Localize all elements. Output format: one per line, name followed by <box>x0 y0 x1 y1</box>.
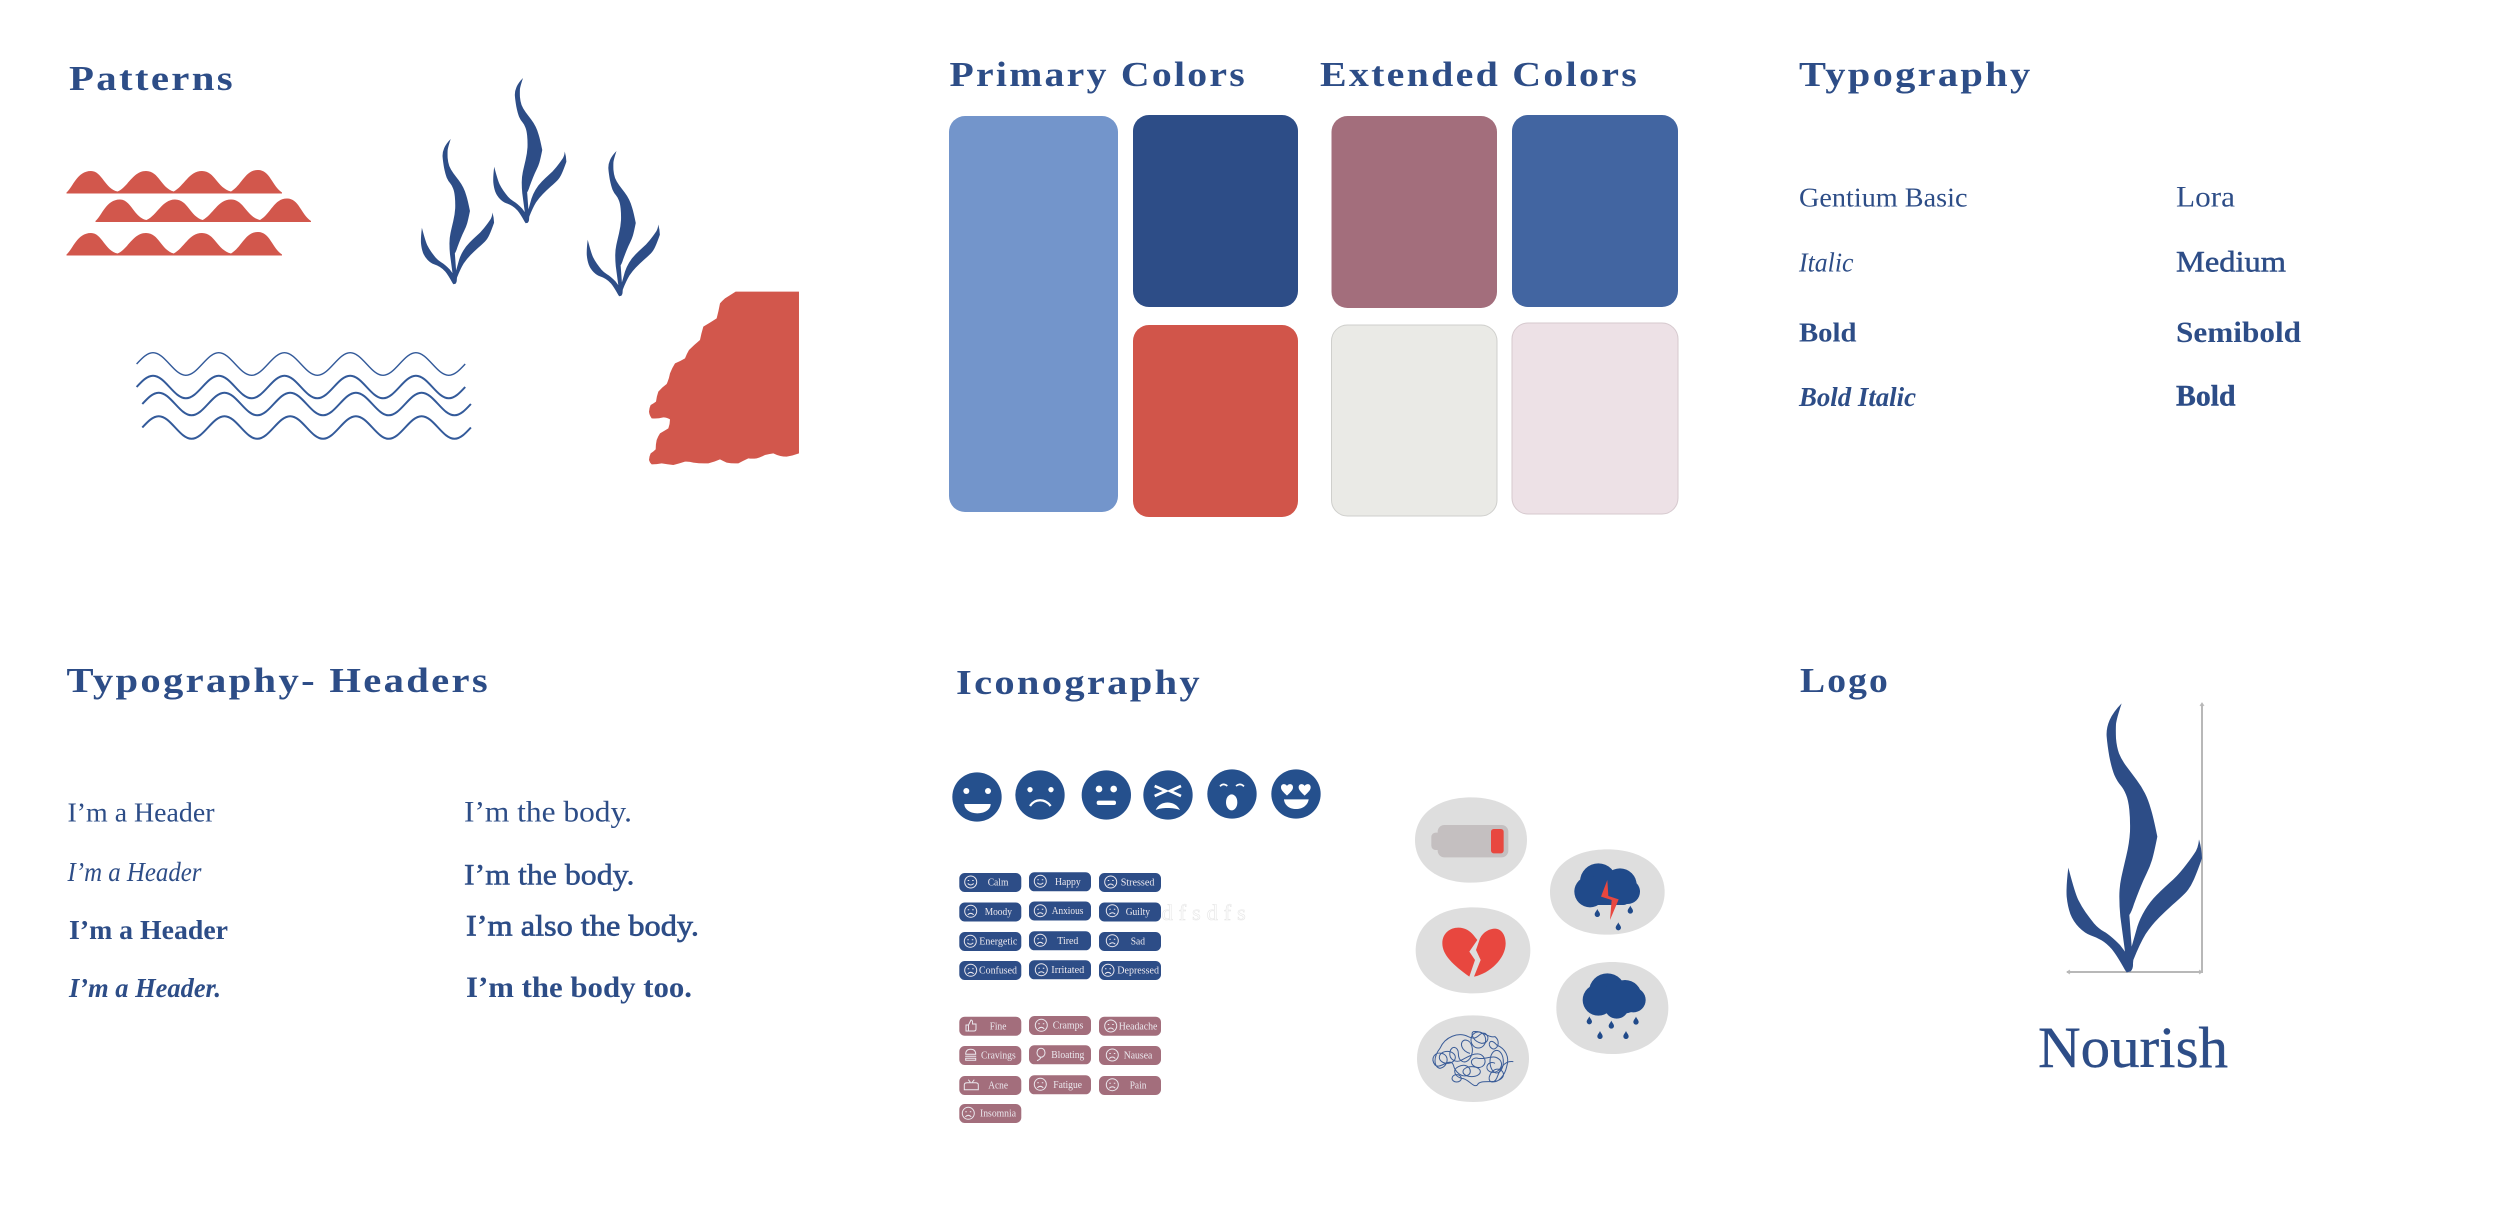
icon: neutral face <box>1082 770 1131 820</box>
mood tags: Anxious <box>1052 906 1083 917</box>
mood tags: Moody <box>985 907 1013 918</box>
ghost text: dfsdfs: dfsdfs <box>1162 900 1246 925</box>
font sample: Gentium Basic: Gentium Basic <box>1799 183 1968 213</box>
header samples: I’m a Header <box>68 798 214 828</box>
symptom tags: Headache <box>1119 1021 1158 1032</box>
panel: typography <box>1798 55 2301 413</box>
illustrated feelings <box>1415 797 1668 1102</box>
font sample: Lora: Semibold <box>2176 316 2301 349</box>
pattern: red hump rows <box>66 170 311 256</box>
font sample: Lora: Bold <box>2176 380 2236 413</box>
symptom tags: Cramps <box>1053 1021 1083 1032</box>
font sample: Lora <box>2176 181 2301 413</box>
font sample: Gentium Basic: Italic <box>1798 248 1854 278</box>
logo wordmark: Nourish <box>2038 1015 2228 1080</box>
panel: extended colors <box>1320 55 1678 516</box>
heading: patterns: Patterns <box>69 59 235 98</box>
body samples: I’m the body. <box>464 858 634 891</box>
icon: rain cloud <box>1556 962 1668 1054</box>
heading: primary colors: Primary Colors <box>950 55 1247 94</box>
pattern: wavy lines <box>137 353 471 439</box>
mood tags: Energetic <box>979 937 1018 948</box>
mood tags: Happy <box>1055 877 1081 888</box>
swatch: light blue <box>949 116 1118 512</box>
symptom tags <box>959 1016 1161 1123</box>
swatch: navy <box>1133 115 1298 307</box>
swatch: warm grey <box>1332 325 1497 516</box>
symptom tags: Nausea <box>1124 1051 1153 1062</box>
font sample: Gentium Basic: Bold <box>1799 318 1856 348</box>
pattern: seaweed sprigs <box>421 78 660 296</box>
mood tags: Tired <box>1057 936 1079 947</box>
mood tags: Depressed <box>1117 966 1160 977</box>
icon: grinning face <box>952 772 1002 822</box>
font sample: Gentium Basic: Bold Italic <box>1798 382 1916 412</box>
swatch: mauve <box>1332 116 1497 308</box>
mood tags: Sad <box>1131 937 1146 948</box>
mood tags: Guilty <box>1126 907 1151 918</box>
mood tags: Confused <box>979 966 1018 977</box>
body samples: I’m the body. <box>464 796 632 829</box>
symptom tags: Insomnia <box>980 1109 1016 1120</box>
heading: typography headers: Typography- Headers <box>66 661 490 700</box>
heading: logo: Logo <box>1800 661 1890 700</box>
panel: typography headers <box>66 661 699 1004</box>
symptom tags: Fatigue <box>1053 1080 1082 1091</box>
mood tags <box>959 872 1161 980</box>
heading: iconography: Iconography <box>956 663 1202 702</box>
swatch: mid blue <box>1512 115 1678 307</box>
body samples <box>464 796 699 1004</box>
symptom tags: Pain <box>1130 1081 1147 1092</box>
font sample: Lora: Medium <box>2176 246 2286 279</box>
header samples: I’m a Header <box>69 915 228 945</box>
icon: heart-eyes face <box>1271 769 1321 819</box>
icon: broken heart <box>1416 907 1530 993</box>
icon: squinting upset face <box>1143 770 1193 820</box>
mood tags: Stressed <box>1121 878 1155 889</box>
panel: logo <box>1800 661 2228 1080</box>
symptom tags: Fine <box>990 1021 1007 1032</box>
panel: patterns <box>66 59 799 465</box>
mood tags: Irritated <box>1051 965 1085 976</box>
logo guide lines <box>2067 703 2204 974</box>
swatch: coral red <box>1133 325 1298 517</box>
panel: iconography <box>952 663 1668 1123</box>
symptom tags: Bloating <box>1051 1050 1085 1061</box>
heading: typography: Typography <box>1799 55 2032 94</box>
icon: sad face <box>1015 770 1065 820</box>
swatch: pale pink <box>1512 323 1678 514</box>
font sample: Lora: Lora <box>2176 181 2235 214</box>
body samples: I’m the body too. <box>466 971 692 1004</box>
body samples: I’m also the body. <box>466 910 699 943</box>
pattern: red coral edge shape <box>649 292 799 465</box>
icon: low battery <box>1415 797 1527 883</box>
header samples <box>67 798 228 1003</box>
mood faces <box>952 769 1321 822</box>
header samples: I’m a Header <box>67 857 202 887</box>
icon: tangled thoughts <box>1417 1015 1529 1102</box>
icon: storm cloud <box>1550 849 1665 935</box>
panel: primary colors <box>949 55 1298 517</box>
header samples: I’m a Header. <box>68 973 221 1003</box>
font sample: Gentium Basic <box>1798 183 1968 412</box>
icon: surprised face <box>1207 769 1257 819</box>
symptom tags: Cravings <box>981 1051 1016 1062</box>
heading: extended colors: Extended Colors <box>1320 55 1639 94</box>
logo mark: seaweed <box>2067 703 2202 972</box>
mood tags: Calm <box>988 878 1008 889</box>
symptom tags: Acne <box>988 1081 1008 1092</box>
